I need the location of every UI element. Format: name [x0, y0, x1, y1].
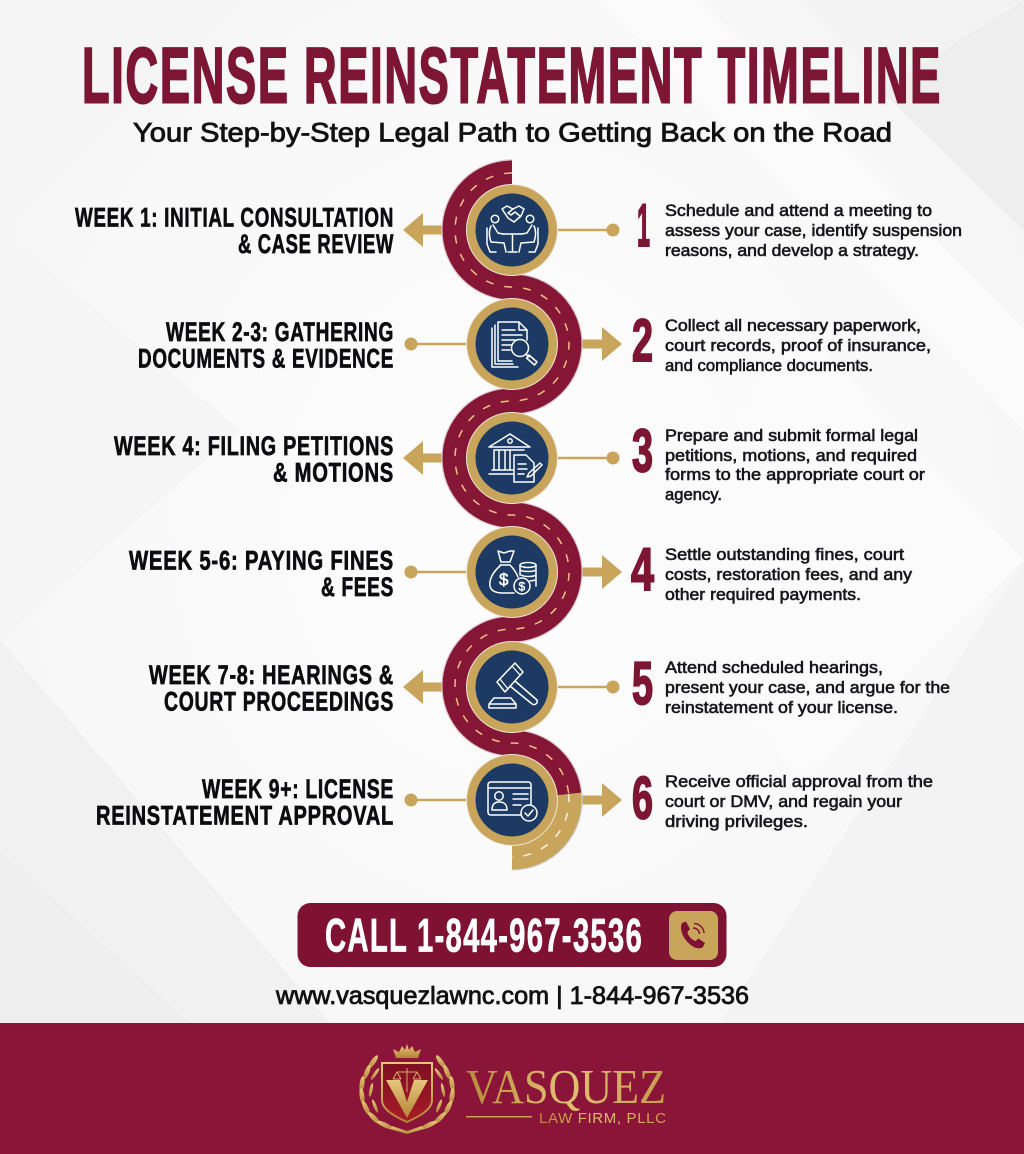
heading: week 9+: REINSTATEMENT APPROVAL	[96, 800, 394, 830]
heading: week 7-8	[149, 660, 394, 716]
step 4	[129, 526, 913, 618]
step 3	[114, 412, 925, 504]
winding road	[455, 173, 569, 857]
heading: week 1: WEEK 1: INITIAL CONSULTATION	[75, 202, 394, 232]
phone number: CALL 1-844-967-3536	[325, 908, 643, 962]
heading: week 2-3	[138, 317, 394, 374]
number 3: 3	[632, 418, 653, 484]
description 1: assess your case, identify suspension	[665, 221, 962, 240]
scales	[393, 1068, 421, 1092]
description 6: court or DMV, and regain your	[665, 792, 902, 811]
logo tagline: LAW FIRM, PLLC	[539, 1110, 666, 1127]
description 5: reinstatement of your license.	[665, 698, 898, 717]
shield	[382, 1063, 432, 1122]
number 2: 2	[632, 307, 653, 374]
icon: gavel	[466, 641, 558, 733]
description 4: other required payments.	[665, 585, 861, 604]
logo emblem	[359, 1044, 455, 1134]
description 3: agency.	[665, 485, 722, 504]
description 2: court records, proof of insurance,	[665, 336, 931, 355]
description 1: Schedule and attend a meeting to	[665, 201, 932, 220]
subtitle: Your Step-by-Step Legal Path to Getting Back on the Road	[133, 118, 892, 148]
description 5	[665, 658, 950, 717]
number 4: 4	[631, 536, 654, 603]
description 3: petitions, motions, and required	[665, 446, 917, 465]
heading: week 7-8: WEEK 7-8: HEARINGS &	[149, 660, 394, 690]
heading: week 5-6: & FEES	[321, 572, 394, 602]
description 4: costs, restoration fees, and any	[665, 565, 913, 584]
step 5	[149, 641, 950, 733]
arrows and connectors	[403, 213, 622, 817]
logo rule	[466, 1116, 532, 1118]
number 5: 5	[632, 650, 653, 717]
icon: document search	[466, 298, 558, 390]
heading: week 2-3: DOCUMENTS & EVIDENCE	[138, 344, 394, 374]
step 6	[96, 754, 933, 846]
icon: money bag and coins: $	[499, 570, 509, 589]
heading: week 1	[75, 202, 394, 259]
description 5: Attend scheduled hearings,	[665, 658, 883, 677]
heading: week 5-6: WEEK 5-6: PAYING FINES	[129, 546, 394, 576]
icon: phone	[669, 911, 718, 960]
description 2: Collect all necessary paperwork,	[665, 316, 921, 335]
description 4	[665, 545, 913, 604]
heading: week 2-3: WEEK 2-3: GATHERING	[166, 317, 394, 347]
description 1: reasons, and develop a strategy.	[665, 241, 919, 260]
heading: week 4: & MOTIONS	[273, 458, 394, 488]
icon: license card with check	[466, 754, 558, 846]
description 5: present your case, and argue for the	[665, 678, 950, 697]
number 6: 6	[632, 764, 653, 832]
step 2	[138, 298, 931, 390]
description 6: driving privileges.	[665, 812, 808, 831]
heading: week 5-6	[129, 546, 394, 602]
V monogram	[386, 1080, 428, 1118]
heading: week 4: WEEK 4: FILING PETITIONS	[114, 431, 394, 461]
description 2: and compliance documents.	[665, 356, 873, 375]
heading: week 1: & CASE REVIEW	[238, 229, 394, 259]
description 4: Settle outstanding fines, court	[665, 545, 904, 564]
description 6: Receive official approval from the	[665, 772, 933, 791]
heading: week 4	[114, 431, 394, 488]
description 2	[665, 316, 931, 375]
description 1	[665, 201, 962, 260]
description 6	[665, 772, 933, 831]
heading: week 9+: WEEK 9+: LICENSE	[202, 774, 394, 804]
wreath	[359, 1054, 455, 1134]
step 1	[75, 184, 962, 276]
logo wordmark: VASQUEZ	[466, 1059, 666, 1114]
description 3: forms to the appropriate court or	[665, 465, 925, 484]
heading: week 9+	[96, 774, 394, 830]
icon: handshake meeting	[466, 184, 558, 276]
step 1: 1	[637, 192, 650, 259]
call button	[298, 903, 726, 967]
contact line: www.vasquezlawnc.com | 1-844-967-3536	[275, 982, 749, 1010]
icon: money bag and coins: $	[518, 580, 526, 594]
icon: money bag and coins	[466, 526, 558, 618]
icon: courthouse and petition	[466, 412, 558, 504]
heading: week 7-8: COURT PROCEEDINGS	[164, 686, 394, 716]
crown	[393, 1044, 421, 1058]
description 3: Prepare and submit formal legal	[665, 426, 918, 445]
footer band	[0, 1023, 1024, 1154]
description 3	[665, 426, 925, 504]
